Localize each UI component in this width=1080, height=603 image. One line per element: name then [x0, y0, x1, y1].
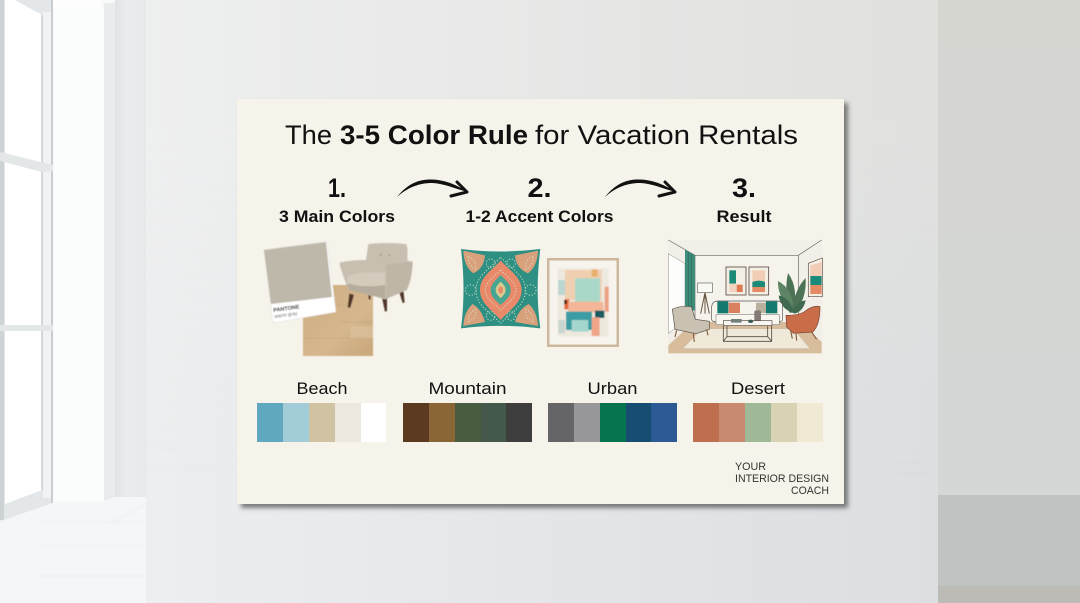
terracotta armchair [786, 306, 820, 341]
poster [237, 99, 844, 504]
step 3 heading: 3. [732, 173, 756, 203]
beige armchair [672, 306, 709, 342]
armchair [339, 243, 413, 312]
plant [778, 273, 806, 314]
brand signature: COACH [791, 485, 829, 497]
arrow: step 2 to step 3 [605, 179, 675, 197]
paint swatch card: warm gray [274, 311, 298, 320]
title: for Vacation Rentals [535, 120, 798, 150]
title: 3-5 Color Rule [340, 120, 528, 150]
rug [683, 329, 810, 349]
title: The [285, 120, 332, 150]
brand signature: YOUR [735, 461, 766, 473]
wood floor sample [303, 285, 373, 356]
floor [0, 497, 146, 603]
title [285, 120, 798, 150]
step 1 heading: 3 Main Colors [279, 207, 395, 226]
step 3 heading [716, 173, 772, 226]
poster board [237, 99, 844, 504]
arrow: step 1 to step 2 [397, 179, 467, 197]
brand signature: INTERIOR DESIGN [735, 473, 829, 485]
step 2 heading: 1-2 Accent Colors [466, 207, 614, 226]
left wall returns [52, 0, 146, 603]
step 2 heading: 2. [528, 173, 552, 203]
image: main colors collage [264, 241, 413, 356]
palette: Desert [693, 379, 823, 442]
step 2 heading [466, 173, 614, 226]
palette: Mountain: Mountain [428, 379, 506, 398]
wall art pair [726, 267, 769, 295]
side wall art [808, 258, 822, 297]
coffee table [723, 319, 772, 341]
palette: Mountain [403, 379, 532, 442]
window panes [5, 0, 42, 163]
palette: Urban: Urban [588, 379, 638, 398]
palette: Desert: Desert [731, 379, 785, 398]
image: accent pillow and framed art [461, 249, 619, 347]
paint swatch card: PANTONE [273, 304, 300, 314]
step 1 heading [279, 173, 395, 226]
floor lamp [698, 283, 712, 314]
palette: Urban [548, 379, 677, 442]
palette: Beach [257, 379, 386, 442]
paint swatch card [264, 241, 336, 323]
window and side wall [0, 0, 146, 603]
patterned pillow [461, 249, 540, 328]
framed abstract art [547, 258, 619, 347]
step 3 heading: Result [716, 207, 772, 226]
palette: Beach: Beach [296, 379, 348, 398]
step 1 heading: 1. [328, 173, 346, 203]
sofa [712, 301, 783, 325]
image: result living room illustration [668, 240, 822, 353]
brand signature [735, 461, 829, 497]
window frame [0, 0, 53, 521]
